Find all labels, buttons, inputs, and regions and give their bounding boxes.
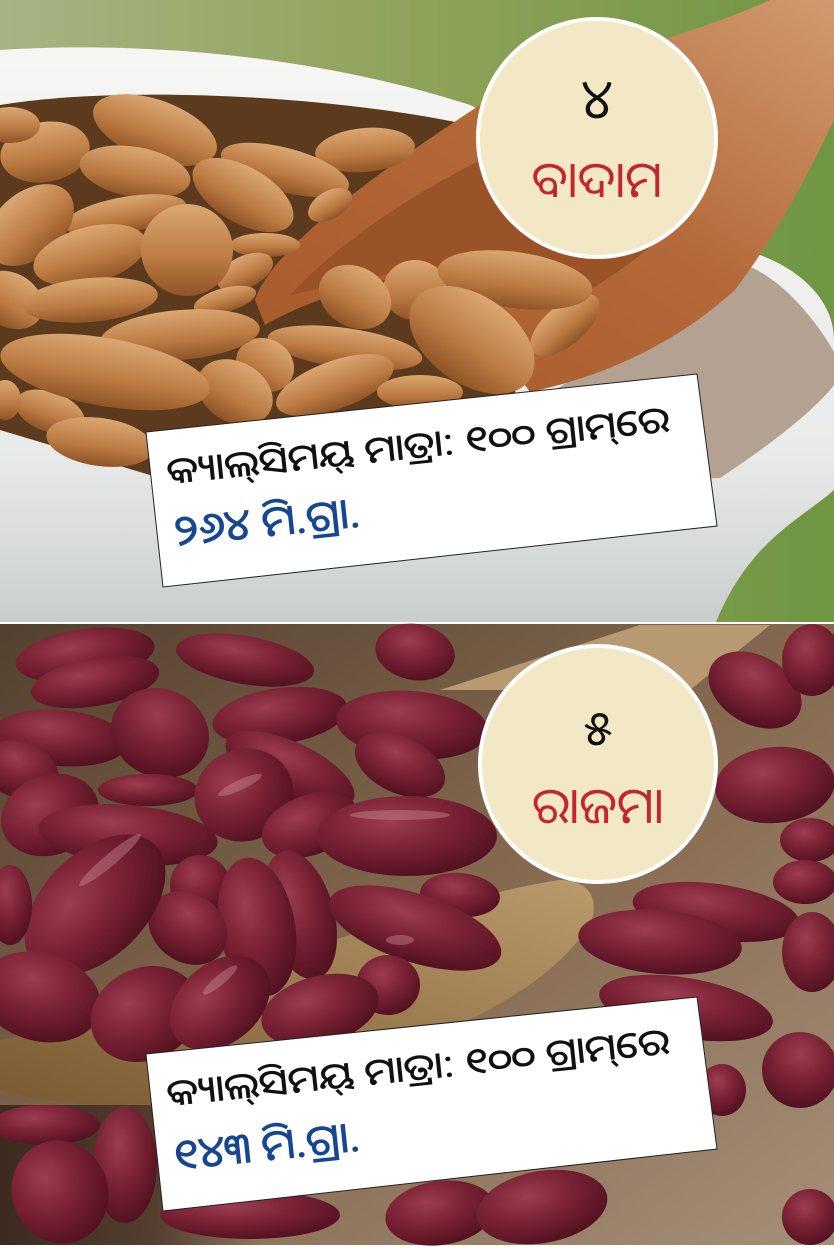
panel: kidney beans photo [0, 617, 834, 1247]
badge: number 4 almonds [478, 19, 716, 257]
wooden spoon [440, 625, 770, 690]
badge number: ୫ [584, 695, 612, 760]
callout amount: ୨୬୪ ମି.ଗ୍ରା. [170, 483, 362, 559]
beans [0, 617, 834, 1247]
badge title: ରାଜମା [532, 770, 664, 838]
badge number: ୪ [582, 60, 612, 134]
bean highlights [76, 770, 450, 998]
callout amount: ୧୪୩ ମି.ଗ୍ରା. [170, 1107, 362, 1183]
callout line 1: କ୍ୟାଲ୍‌ସିମୟ୍ ମାତ୍ରା: ୧୦୦ ଗ୍ରାମ୍‌ରେ [164, 1015, 672, 1117]
callout: kidney bean calcium [146, 997, 717, 1211]
wooden scoop [255, 0, 834, 392]
bowl [0, 47, 834, 622]
callout line 1: କ୍ୟାଲ୍‌ସିମୟ୍ ମାତ୍ରା: ୧୦୦ ଗ୍ରାମ୍‌ରେ [164, 393, 672, 495]
badge: number 5 kidney beans [480, 646, 716, 882]
panel: almonds photo [0, 0, 834, 622]
callout: almond calcium [146, 374, 717, 587]
almonds [0, 80, 610, 473]
badge title: ବାଦାମ [532, 144, 662, 212]
